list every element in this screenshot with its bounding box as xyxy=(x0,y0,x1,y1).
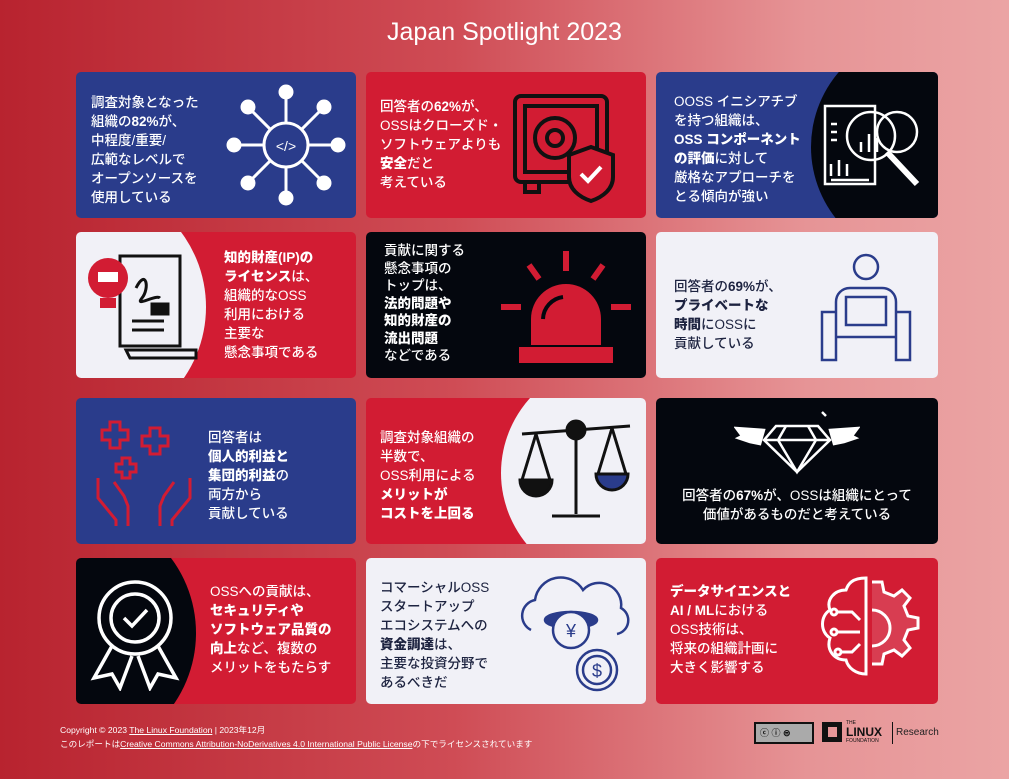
icon: person laptop chair xyxy=(820,254,912,362)
text: IP: 主要な xyxy=(224,326,264,341)
text: IP: 懸念事項である xyxy=(224,345,318,360)
text: OOSS xyxy=(674,94,801,204)
text: merits: メリットが xyxy=(380,487,448,502)
text: funding: 資金調達は、 xyxy=(380,637,461,652)
icon: network code: </> xyxy=(276,138,296,154)
text: OOSS: 厳格なアプローチを xyxy=(674,170,796,185)
panel: 82% open source use xyxy=(76,72,356,218)
text: concerns: 懸念事項の xyxy=(384,260,452,276)
text: funding: コマーシャルOSS xyxy=(380,580,489,595)
icon: hands with crosses xyxy=(96,420,192,526)
text: merits: 調査対象組織の xyxy=(380,430,474,445)
text: security: OSSへの貢献は、 xyxy=(210,584,320,599)
icon: winged diamond xyxy=(734,411,860,474)
text: IP xyxy=(224,250,318,360)
panel: OOSS initiative xyxy=(656,72,938,218)
panel: legal concerns xyxy=(366,232,646,378)
text: 82%: 組織の82%が、 xyxy=(91,114,185,129)
text: merits: OSS利用による xyxy=(380,468,476,483)
panel: IP license xyxy=(76,232,356,378)
shape: light left curve xyxy=(0,182,206,432)
text: 82%: 使用している xyxy=(91,190,172,205)
text: concerns: 流出問題 xyxy=(384,330,438,346)
shape: black left curve xyxy=(0,508,196,758)
text: 62% xyxy=(380,99,502,190)
text: IP: ライセンスは、 xyxy=(224,269,318,284)
text: 82% xyxy=(91,95,199,205)
text: concerns: トップは、 xyxy=(384,278,452,293)
logo: Linux Foundation xyxy=(822,720,882,744)
logo: Linux Foundation: THE xyxy=(846,720,856,726)
logo: Linux Foundation: FOUNDATION xyxy=(846,738,879,744)
text: OOSS: OSS コンポーネント xyxy=(674,132,801,147)
text: 82%: 調査対象となった xyxy=(91,95,199,110)
text: 67%: 回答者の67%が、OSSは組織にとって xyxy=(682,488,912,503)
text: concerns: 法的問題や xyxy=(384,296,452,310)
icon: scales xyxy=(518,420,630,518)
icon: magnifier report xyxy=(824,104,920,186)
text: funding: スタートアップ xyxy=(380,599,474,614)
icon: cloud yen dollar xyxy=(520,576,630,692)
text: IP: 組織的なOSS xyxy=(224,288,307,303)
text: concerns: 貢献に関する xyxy=(384,243,465,258)
text: AI/ML: データサイエンスと xyxy=(670,584,791,599)
shape: light right ellipse xyxy=(501,358,741,588)
title: Japan Spotlight 2023 xyxy=(387,18,622,46)
icon: brain gear xyxy=(821,576,920,676)
icon: siren xyxy=(501,251,631,363)
icon: license document xyxy=(88,254,198,360)
panel: benefits exceed costs xyxy=(366,398,646,544)
panel: 62% safer xyxy=(366,72,646,218)
text: security: メリットをもたらす xyxy=(210,660,331,675)
panel: 69% private time xyxy=(656,232,938,378)
icon: cloud yen dollar: $ xyxy=(592,661,602,681)
icon: network code xyxy=(226,84,346,206)
panel: personal and collective xyxy=(76,398,356,544)
text: 62%: 考えている xyxy=(380,175,447,190)
text: 69% xyxy=(674,279,782,351)
text: 69%: 回答者の69%が、 xyxy=(674,279,782,294)
text: security: ソフトウェア品質の xyxy=(210,622,332,637)
icon: cc by-nd xyxy=(754,722,814,744)
text: AI/ML: AI / MLにおける xyxy=(670,603,768,618)
footer text xyxy=(60,725,532,749)
panel: funding startups xyxy=(366,558,646,704)
text: Research: Research xyxy=(896,727,939,738)
text: security: 向上など、複数の xyxy=(210,641,317,656)
logo: Linux Foundation: LINUX xyxy=(846,725,882,739)
text: merits: 半数で、 xyxy=(380,449,433,464)
text: 62%: ソフトウェアよりも xyxy=(380,137,501,152)
text: funding: 主要な投資分野で xyxy=(380,656,488,671)
text: 67%: 価値があるものだと考えている xyxy=(703,507,891,522)
text: OOSS: を持つ組織は、 xyxy=(674,113,768,128)
text: 82%: 中程度/重要/ xyxy=(91,133,166,148)
icon: cloud yen dollar: ¥ xyxy=(565,621,577,641)
text: funding: エコシステムへの xyxy=(380,618,488,633)
text: funding xyxy=(380,580,489,690)
text: 67% xyxy=(682,488,912,522)
text: merits: コストを上回る xyxy=(380,506,474,521)
footer logos xyxy=(754,720,939,744)
text: 62%: 回答者の62%が、 xyxy=(380,99,488,114)
footer text: Copyright © 2023 The Linux Foundation | 2023年12月 xyxy=(60,725,265,735)
text: AI/ML: 将来の組織計画に xyxy=(670,641,778,656)
panel: data science AI/ML xyxy=(656,558,938,704)
text: OOSS: とる傾向が強い xyxy=(674,189,768,204)
footer text: このレポートはCreative Commons Attribution-NoDerivatives 4.0 International Public Licenseの下でライセンスされています xyxy=(60,739,532,749)
text: OOSS: OOSS イニシアチブ xyxy=(674,94,798,109)
panel: 67% value xyxy=(656,398,938,544)
text: AI/ML: OSS技術は、 xyxy=(670,622,753,637)
text: concerns: 知的財産の xyxy=(384,313,452,328)
text: interests: 貢献している xyxy=(208,506,289,521)
text: interests xyxy=(208,430,289,521)
text: funding: あるべきだ xyxy=(380,675,448,690)
panel: security quality xyxy=(76,558,356,704)
icon: award badge xyxy=(90,580,180,691)
text: 62%: 安全だと xyxy=(380,156,434,171)
text: security xyxy=(210,584,332,675)
text: interests: 両方から xyxy=(208,487,262,502)
text: interests: 回答者は xyxy=(208,430,262,445)
text: AI/ML xyxy=(670,584,791,675)
text: 82%: 広範なレベルで xyxy=(91,152,186,167)
text: security: セキュリティや xyxy=(210,603,304,618)
text: 69%: 貢献している xyxy=(674,336,755,351)
text: OOSS: の評価に対して xyxy=(674,151,768,166)
text: concerns: などである xyxy=(384,348,451,363)
text: 82%: オープンソースを xyxy=(91,171,198,186)
text: interests: 個人的利益と xyxy=(208,449,289,464)
text: 69%: 時間にOSSに xyxy=(674,317,757,332)
text: interests: 集団的利益の xyxy=(208,468,289,483)
text: IP: 知的財産(IP)の xyxy=(224,250,313,265)
text: merits xyxy=(380,430,476,521)
icon: safe xyxy=(513,94,615,204)
text: 69%: プライベートな xyxy=(674,298,768,313)
text: IP: 利用における xyxy=(224,307,305,322)
icon: cc by-nd: ⓒ ⓘ ⊜ xyxy=(760,728,791,738)
text: 62%: OSSはクローズド・ xyxy=(380,118,502,133)
shape: black ellipse xyxy=(811,32,1009,262)
text: AI/ML: 大きく影響する xyxy=(670,660,764,675)
text: concerns xyxy=(384,243,465,363)
